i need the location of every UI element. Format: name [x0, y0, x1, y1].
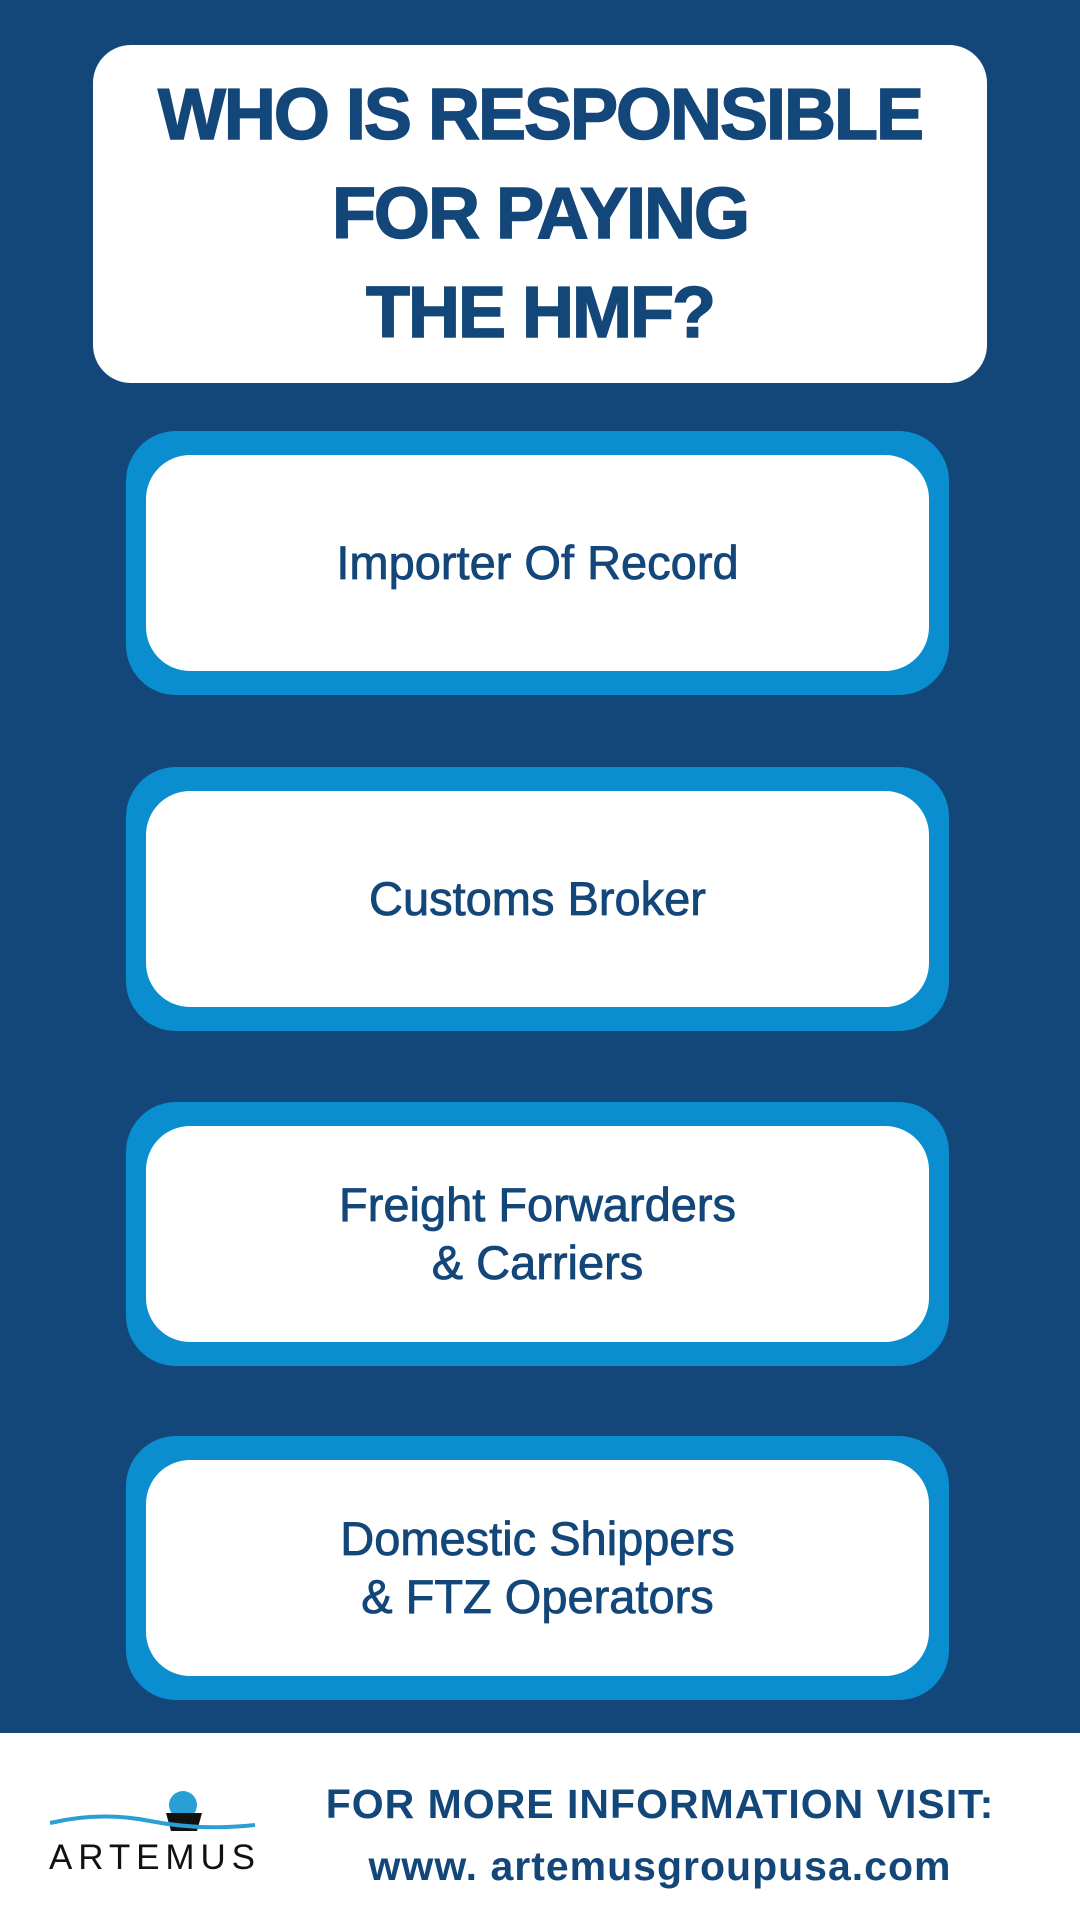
- title: [93, 45, 987, 383]
- card: customs broker: [126, 767, 949, 1031]
- logo: ARTEMUS: [49, 1838, 257, 1877]
- title: THE HMF?: [366, 272, 714, 352]
- footer: [0, 1733, 1080, 1920]
- card: freight forwarders: [126, 1102, 949, 1366]
- card: customs broker: Customs Broker: [369, 872, 706, 925]
- card: domestic shippers: Domestic Shippers: [340, 1512, 735, 1565]
- title: FOR PAYING: [332, 174, 748, 254]
- title: WHO IS RESPONSIBLE: [158, 74, 922, 154]
- card: importer of record: [126, 431, 949, 695]
- card: domestic shippers: & FTZ Operators: [361, 1570, 714, 1623]
- logo: [49, 1791, 257, 1877]
- url: www. artemusgroupusa.com: [369, 1843, 951, 1889]
- card: freight forwarders: Freight Forwarders: [339, 1178, 736, 1231]
- card: domestic shippers: [126, 1436, 949, 1700]
- card: importer of record: Importer Of Record: [336, 536, 739, 589]
- card: freight forwarders: & Carriers: [432, 1236, 643, 1289]
- footer text: FOR MORE INFORMATION VISIT:: [326, 1781, 994, 1827]
